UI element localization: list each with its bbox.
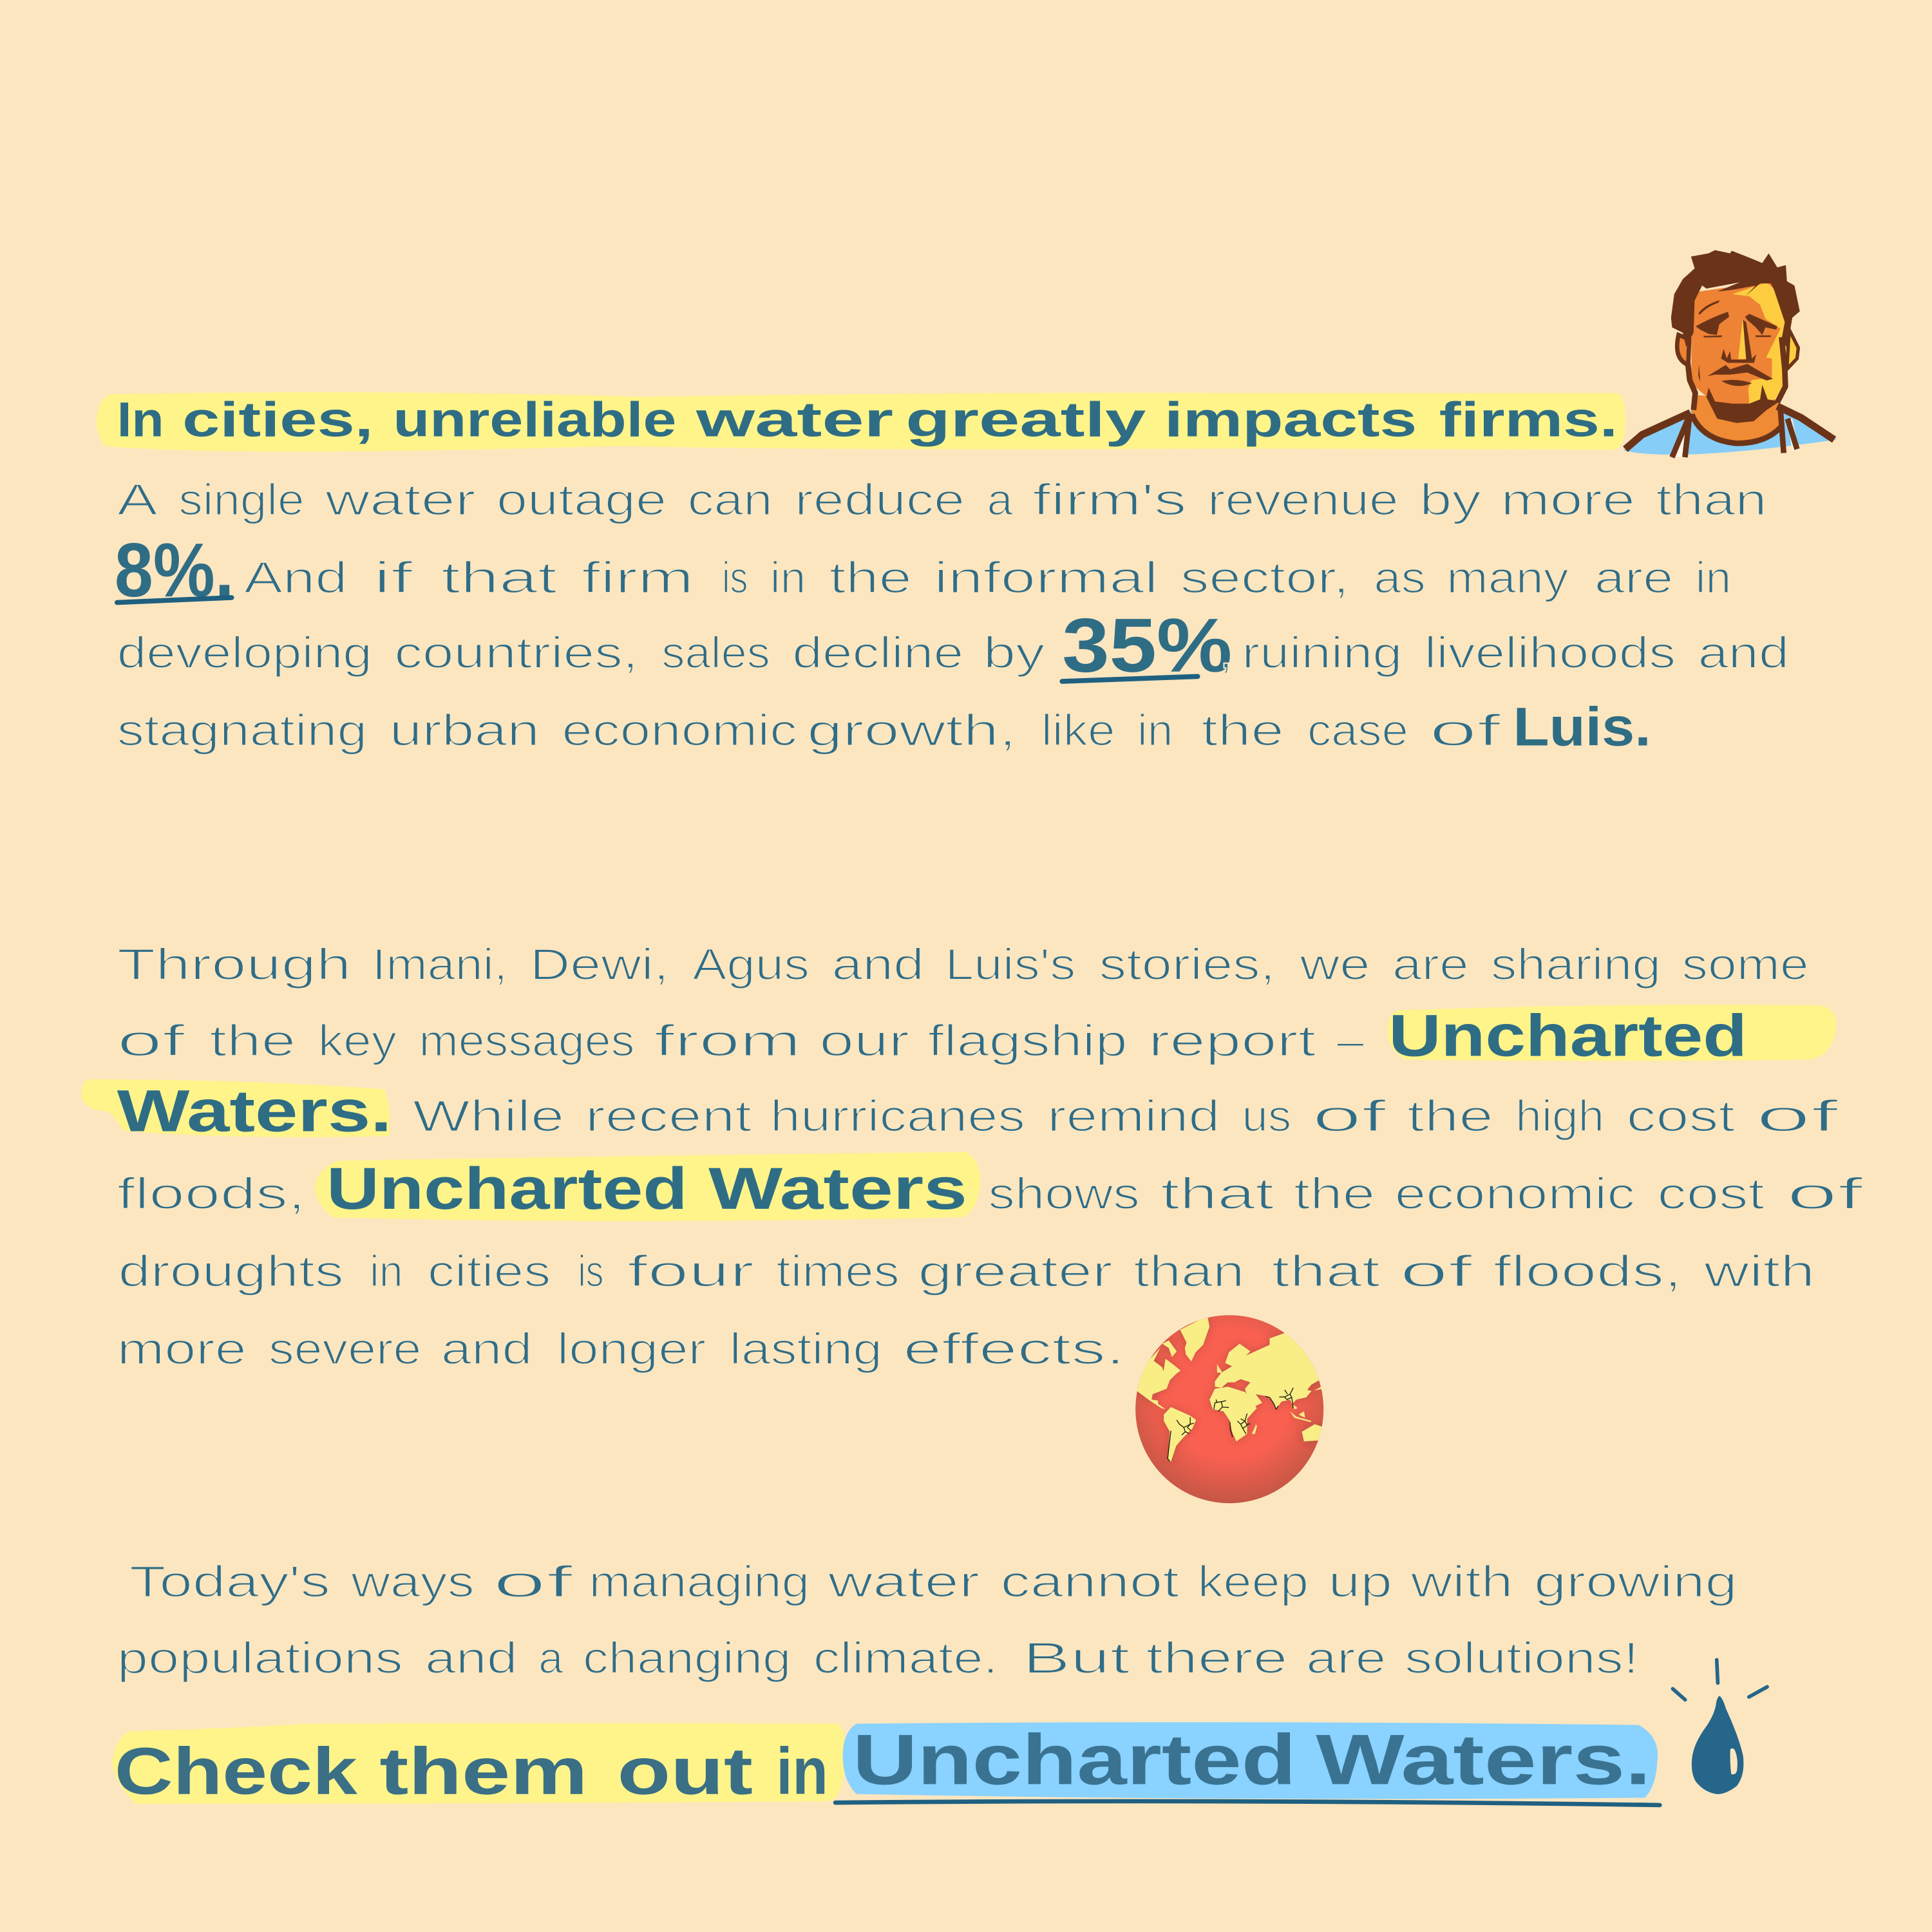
- line 5: [118, 1246, 1815, 1296]
- line 2: the: [209, 1016, 296, 1066]
- line 1: sharing: [1491, 940, 1661, 989]
- title: [117, 392, 1618, 447]
- line 4: the: [1294, 1169, 1375, 1218]
- rays: [1672, 1660, 1767, 1700]
- line 4: Waters: [708, 1156, 967, 1222]
- drop highlight: [1730, 1748, 1738, 1774]
- line 2: in: [770, 553, 806, 602]
- line 1: [117, 940, 1809, 989]
- line 4: floods,: [117, 1169, 305, 1218]
- line 1: cannot: [1001, 1557, 1179, 1607]
- underline: 8%: [117, 598, 232, 603]
- line 2: the: [829, 553, 912, 602]
- line 1: up: [1328, 1557, 1392, 1607]
- line 6: [117, 1324, 1125, 1374]
- line 3: [117, 1078, 1840, 1144]
- line 1: single: [178, 475, 305, 525]
- line 4: [117, 1156, 1864, 1222]
- line 1: and: [831, 940, 924, 989]
- highlight: title: [97, 392, 1625, 451]
- line 3: livelihoods: [1425, 628, 1676, 677]
- line 4: Uncharted: [327, 1156, 688, 1222]
- line 2: many: [1446, 553, 1569, 602]
- line 3: 35%: [1062, 603, 1232, 688]
- line 2: key: [318, 1016, 397, 1066]
- line 3: hurricanes: [770, 1091, 1025, 1141]
- line 2: are: [1595, 553, 1673, 602]
- line 3: the: [1407, 1091, 1493, 1141]
- highlight: Uncharted Waters line 4: [315, 1152, 980, 1221]
- line 2: in: [1696, 553, 1731, 602]
- line 1: we: [1299, 940, 1370, 989]
- line 2: 8%.: [115, 528, 234, 613]
- line 1: than: [1656, 475, 1767, 525]
- shoulders: [1625, 406, 1834, 449]
- line 4: of: [1429, 706, 1502, 755]
- line 5: that: [1271, 1246, 1380, 1296]
- panel: key messages paragraph: [81, 940, 1864, 1374]
- line 6: longer: [557, 1324, 706, 1374]
- line 1: Today's: [129, 1557, 330, 1607]
- line 5: floods,: [1493, 1246, 1682, 1296]
- line 2: [117, 1633, 1639, 1683]
- line 4: in: [1137, 706, 1173, 755]
- link underline: [835, 1801, 1660, 1805]
- facial features: [1696, 300, 1779, 423]
- line 2: climate.: [813, 1633, 998, 1683]
- panel: firms paragraph: [97, 392, 1789, 757]
- line 2: And: [244, 553, 348, 602]
- call to action: in: [776, 1734, 828, 1808]
- title: unreliable: [393, 392, 676, 447]
- line 2: populations: [117, 1633, 403, 1683]
- line 1: ways: [350, 1557, 475, 1607]
- line 6: severe: [269, 1324, 421, 1374]
- line 2: report: [1148, 1016, 1316, 1066]
- line 2: that: [441, 553, 557, 602]
- drought cracks: [1168, 1388, 1293, 1461]
- line 2: Uncharted: [1388, 1003, 1747, 1069]
- line 6: effects.: [903, 1324, 1125, 1374]
- line 1: [117, 475, 1767, 525]
- call to action: out: [618, 1734, 753, 1808]
- line 1: Dewi,: [530, 940, 669, 989]
- line 2: if: [374, 553, 413, 602]
- line 4: that: [1160, 1169, 1274, 1218]
- line 3: of: [1756, 1091, 1840, 1141]
- line 2: there: [1146, 1633, 1287, 1683]
- line 1: keep: [1198, 1557, 1309, 1607]
- line 2: and: [425, 1633, 518, 1683]
- line 3: and: [1698, 628, 1789, 677]
- line 2: our: [819, 1016, 909, 1066]
- line 5: greater: [918, 1246, 1113, 1296]
- line 2: as: [1374, 553, 1426, 602]
- highlight: Waters line 3: [81, 1079, 390, 1137]
- line 1: growing: [1534, 1557, 1738, 1607]
- line 6: more: [117, 1324, 247, 1374]
- line 1: some: [1682, 940, 1809, 989]
- line 6: lasting: [730, 1324, 882, 1374]
- line 3: countries,: [394, 628, 638, 677]
- call to action: Waters.: [1316, 1719, 1651, 1799]
- line 1: firm's: [1032, 475, 1186, 525]
- call to action: [115, 1719, 1651, 1808]
- line 4: cost: [1657, 1169, 1765, 1218]
- line 1: A: [117, 475, 158, 525]
- line 5: of: [1399, 1246, 1473, 1296]
- line 4: [117, 697, 1651, 757]
- ear left: [1677, 335, 1689, 365]
- line 2: –: [1337, 1016, 1365, 1066]
- icon: cracked globe: [1133, 1315, 1324, 1503]
- line 5: in: [370, 1246, 403, 1296]
- title: impacts: [1164, 392, 1417, 447]
- line 2: messages: [419, 1016, 634, 1066]
- line 3: ruining: [1242, 628, 1402, 677]
- line 5: than: [1133, 1246, 1244, 1296]
- line 2: sector,: [1180, 553, 1349, 602]
- line 4: case: [1307, 706, 1408, 755]
- line 2: [115, 528, 1731, 613]
- title: firms.: [1439, 392, 1618, 447]
- line 1: managing: [589, 1557, 810, 1607]
- line 3: decline: [792, 628, 963, 677]
- line 5: cities: [428, 1246, 551, 1296]
- title: greatly: [905, 392, 1146, 447]
- line 3: ,: [1220, 628, 1232, 677]
- icon: Luis portrait: [1623, 250, 1836, 457]
- line 1: more: [1501, 475, 1635, 525]
- line 4: economic: [1395, 1169, 1635, 1218]
- ear right: [1787, 330, 1798, 369]
- line 4: shows: [988, 1169, 1140, 1218]
- line 2: solutions!: [1405, 1633, 1639, 1683]
- body text: second paragraph: [117, 940, 1864, 1374]
- line 6: and: [441, 1324, 533, 1374]
- line 1: revenue: [1208, 475, 1399, 525]
- line 1: stories,: [1099, 940, 1275, 989]
- face: [1691, 281, 1786, 412]
- line 3: recent: [585, 1091, 752, 1141]
- line 1: water: [827, 1557, 980, 1607]
- panel: solutions paragraph: [112, 1557, 1738, 1808]
- line 3: sales: [661, 628, 770, 677]
- line 4: like: [1041, 706, 1115, 755]
- line 3: high: [1515, 1091, 1604, 1141]
- line 5: with: [1703, 1246, 1815, 1296]
- line 5: four: [627, 1246, 754, 1296]
- line 3: Waters.: [117, 1078, 392, 1144]
- face highlight: [1732, 282, 1786, 404]
- continents: [1133, 1316, 1324, 1462]
- highlight: Uncharted line 2: [1387, 1005, 1836, 1061]
- line 1: [129, 1557, 1738, 1607]
- line 1: with: [1410, 1557, 1513, 1607]
- line 2: of: [117, 1016, 186, 1066]
- call to action: them: [379, 1734, 588, 1808]
- line 2: changing: [583, 1633, 791, 1683]
- line 5: times: [776, 1246, 900, 1296]
- line 2: [117, 1003, 1747, 1069]
- line 2: a: [538, 1633, 564, 1683]
- line 2: are: [1306, 1633, 1386, 1683]
- line 2: from: [654, 1016, 801, 1066]
- line 3: developing: [117, 628, 372, 677]
- line 1: Through: [117, 940, 351, 989]
- line 1: are: [1392, 940, 1469, 989]
- line 1: a: [987, 475, 1013, 525]
- line 1: Imani,: [372, 940, 507, 989]
- highlight: check them out in: [112, 1723, 846, 1804]
- line 5: droughts: [118, 1246, 344, 1296]
- line 4: urban: [390, 706, 540, 755]
- shirt straps: [1673, 419, 1799, 457]
- line 4: the: [1201, 706, 1284, 755]
- line 2: flagship: [928, 1016, 1128, 1066]
- line 2: But: [1023, 1633, 1130, 1683]
- title: water: [695, 392, 893, 447]
- icon: water drop with rays: [1672, 1660, 1767, 1794]
- line 4: of: [1786, 1169, 1864, 1218]
- line 4: stagnating: [117, 706, 367, 755]
- line 2: firm: [582, 553, 694, 602]
- line 4: Luis.: [1513, 697, 1651, 757]
- line 3: While: [413, 1091, 564, 1141]
- shirt: [1623, 404, 1836, 455]
- call to action: Uncharted: [853, 1719, 1296, 1799]
- line 5: is: [578, 1246, 604, 1296]
- line 1: Luis's: [945, 940, 1075, 989]
- neck: [1691, 395, 1781, 443]
- hair: [1671, 250, 1800, 348]
- line 3: by: [983, 628, 1045, 677]
- body text: first paragraph: [115, 475, 1789, 757]
- line 4: growth,: [807, 706, 1016, 755]
- face outline and collar: [1672, 337, 1797, 457]
- ocean: [1135, 1315, 1323, 1503]
- line 3: of: [1312, 1091, 1387, 1141]
- line 2: is: [722, 553, 748, 602]
- call to action: Check: [115, 1734, 358, 1808]
- line 1: Agus: [692, 940, 810, 989]
- line 3: cost: [1627, 1091, 1735, 1141]
- line 1: can: [688, 475, 773, 525]
- line 1: water: [325, 475, 476, 525]
- title: In: [117, 392, 164, 447]
- line 1: of: [493, 1557, 574, 1607]
- line 1: by: [1419, 475, 1481, 525]
- line 4: economic: [562, 706, 797, 755]
- line 2: informal: [934, 553, 1158, 602]
- line 3: [117, 603, 1789, 688]
- line 3: remind: [1047, 1091, 1220, 1141]
- underline: 35%: [1062, 676, 1198, 681]
- title: cities,: [182, 392, 374, 447]
- line 3: us: [1242, 1091, 1291, 1141]
- body text: third paragraph: [117, 1557, 1738, 1683]
- line 1: outage: [497, 475, 667, 525]
- highlight: Uncharted Waters link: [843, 1722, 1658, 1799]
- line 1: reduce: [795, 475, 965, 525]
- drop: [1692, 1696, 1743, 1794]
